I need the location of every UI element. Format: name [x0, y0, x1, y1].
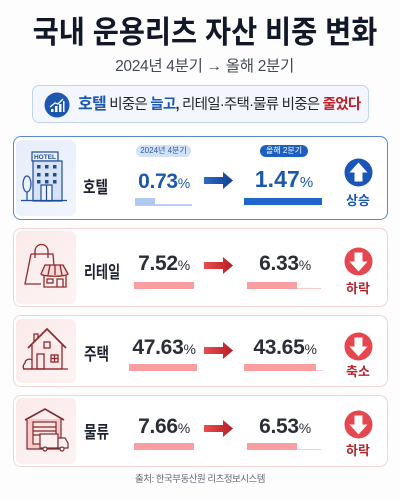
panel: logistics [13, 395, 388, 467]
bar: logistics after [247, 443, 321, 450]
icon: shopping bag and store [16, 231, 76, 304]
arrow: housing [204, 342, 233, 359]
banner text: 호텔 비중은 늘고, 리테일·주택·물류 비중은 줄었다 [78, 96, 360, 113]
arrow: hotel [204, 172, 233, 189]
status: fall: 하락 [346, 443, 370, 458]
bar: housing after [244, 364, 323, 371]
source: 출처: 한국부동산원 리츠정보시스템 [135, 474, 265, 485]
card: logistics [13, 395, 388, 467]
card: hotel [13, 136, 388, 220]
bar: logistics before [134, 443, 194, 450]
label: housing: 주택 [84, 345, 109, 364]
panel: hotel [13, 136, 388, 220]
value: retail before: 7.52% [138, 252, 190, 275]
panel: retail [13, 228, 388, 307]
bar: retail before [134, 282, 194, 289]
badge: this year Q2: 올해 2분기 [266, 146, 302, 155]
icon: rising chart [44, 92, 70, 118]
badge: 2024 Q4 [136, 145, 191, 157]
value: logistics after: 6.53% [259, 415, 311, 438]
card: retail [13, 228, 388, 307]
bar: hotel after [244, 198, 322, 205]
icon: hotel: HOTEL [34, 154, 56, 161]
icon: down arrow [344, 248, 372, 276]
label: retail: 리테일 [84, 263, 120, 282]
status: rise: 상승 [346, 193, 370, 208]
subtitle: 2024년 4분기 → 올해 2분기 [115, 58, 294, 75]
bar: hotel before [135, 198, 192, 206]
icon: hotel [16, 140, 76, 216]
label: logistics: 물류 [84, 423, 109, 442]
panel: housing [13, 315, 388, 387]
value: hotel after: 1.47% [255, 166, 313, 192]
value: logistics before: 7.66% [138, 415, 190, 438]
icon: up arrow [344, 158, 372, 186]
card: housing [13, 315, 388, 387]
badge: this year Q2 [260, 145, 308, 157]
arrow: logistics [204, 420, 233, 437]
icon: down arrow [344, 332, 372, 360]
bar: housing before [129, 364, 197, 371]
badge: 2024 Q4: 2024년 4분기 [140, 146, 187, 155]
bar: retail after [247, 282, 321, 289]
value: housing after: 43.65% [253, 336, 317, 359]
arrow: retail [204, 257, 233, 274]
label: hotel: 호텔 [83, 178, 108, 197]
status: fall: 하락 [346, 281, 370, 296]
summary banner [32, 85, 369, 123]
value: retail after: 6.33% [259, 252, 311, 275]
value: hotel before: 0.73% [138, 170, 190, 193]
icon: warehouse and truck [16, 398, 76, 464]
status: shrink: 축소 [346, 364, 370, 379]
icon: down arrow [344, 410, 372, 438]
icon: house [16, 319, 76, 383]
value: housing before: 47.63% [132, 336, 196, 359]
title: 국내 운용리츠 자산 비중 변화 [33, 15, 377, 50]
